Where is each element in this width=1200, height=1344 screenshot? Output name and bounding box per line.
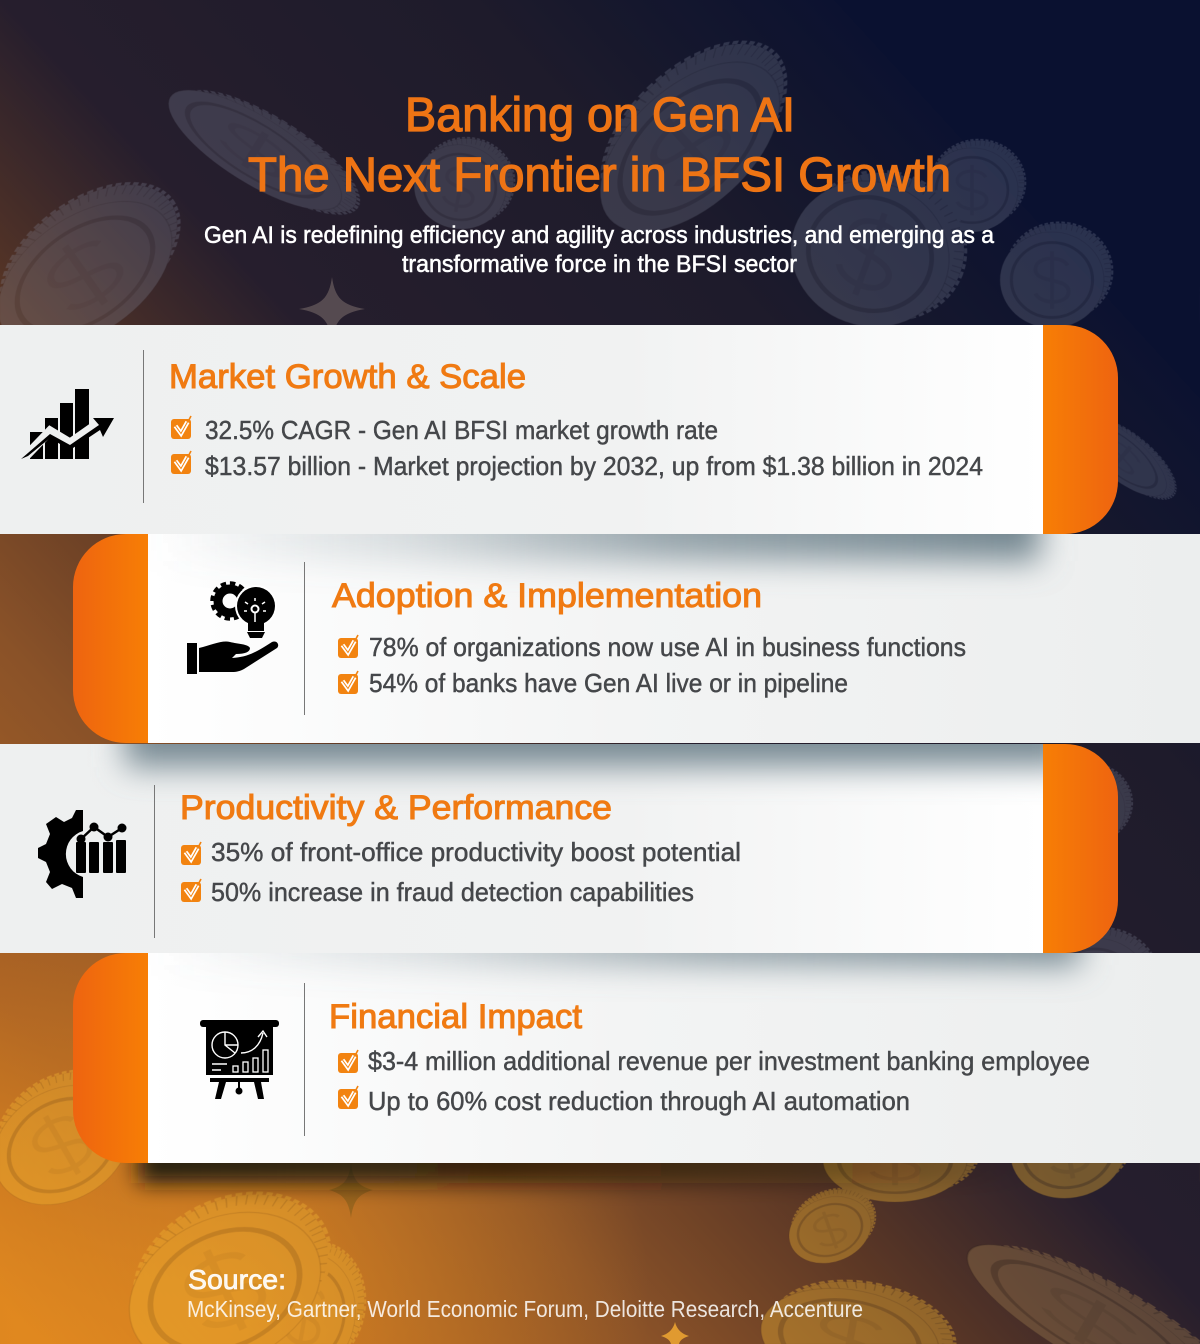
source: McKinsey, Gartner, World Economic Forum, Deloitte Research, Accenture (187, 1296, 863, 1322)
bullet text: Up to 60% cost reduction through AI automation (368, 1086, 910, 1116)
check icon (171, 416, 191, 439)
bullet text: $3-4 million additional revenue per investment banking employee (368, 1046, 1090, 1076)
subtitle: Gen AI is redefining efficiency and agility across industries, and emerging as a (204, 222, 995, 249)
sparkle star: top left (299, 277, 365, 341)
check icon (171, 451, 191, 474)
panel: market growth and scale (0, 325, 1118, 534)
icon: hand holding lightbulb and gear (187, 583, 278, 674)
sparkle star: mid (329, 1163, 373, 1218)
panel: adoption and implementation (73, 534, 1200, 743)
panel: financial impact (73, 925, 1200, 1183)
bullet text: 35% of front-office productivity boost potential (211, 837, 741, 867)
bottom shadow (138, 1145, 1038, 1183)
bullet text: 32.5% CAGR - Gen AI BFSI market growth rate (205, 415, 718, 445)
title (248, 89, 951, 202)
heading: Productivity & Performance (180, 789, 612, 827)
check icon (181, 879, 201, 902)
check icon (338, 671, 358, 694)
heading: Market Growth & Scale (169, 358, 526, 396)
background coins: dark upper group (0, 0, 1200, 1050)
bullet text: 54% of banks have Gen AI live or in pipeline (369, 668, 848, 698)
icon: presentation board (200, 1020, 279, 1099)
source (187, 1264, 863, 1322)
icon: gear with bar chart (38, 810, 126, 898)
heading: Adoption & Implementation (332, 577, 762, 615)
bullet text: $13.57 billion - Market projection by 2032, up from $1.38 billion in 2024 (205, 451, 983, 481)
source: Source: (188, 1264, 286, 1295)
title: The Next Frontier in BFSI Growth (248, 149, 951, 202)
sparkle star: bottom (661, 1322, 689, 1344)
panel: productivity and performance (0, 744, 1118, 953)
title: Banking on Gen AI (405, 89, 795, 142)
heading: Financial Impact (329, 998, 583, 1036)
check icon (338, 1086, 358, 1109)
check icon (181, 842, 201, 865)
subtitle: transformative force in the BFSI sector (402, 251, 797, 278)
background coins: gold lower group (0, 1050, 1200, 1344)
icon: bar chart with rising arrow (21, 389, 114, 459)
check icon (338, 635, 358, 658)
subtitle (204, 222, 995, 278)
bullet text: 50% increase in fraud detection capabilities (211, 877, 694, 907)
bullet text: 78% of organizations now use AI in business functions (369, 632, 966, 662)
check icon (338, 1050, 358, 1073)
